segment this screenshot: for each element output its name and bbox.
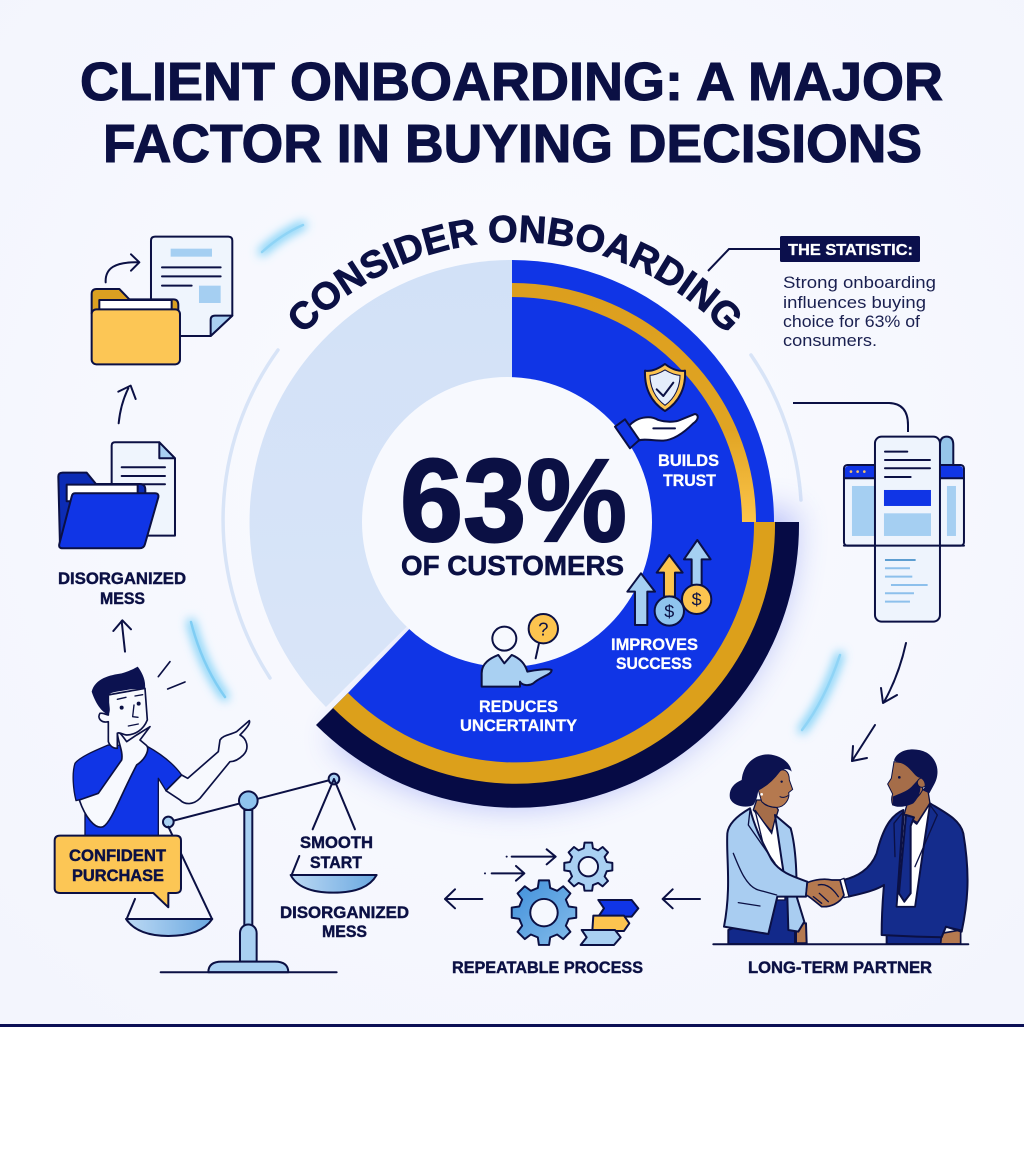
- label: builds trust: BUILDS: [658, 451, 719, 470]
- decorative glow arcs: [191, 225, 840, 730]
- illustration: thinking person: [73, 662, 250, 837]
- label: repeatable process: REPEATABLE PROCESS: [452, 958, 643, 977]
- beam: [163, 774, 339, 827]
- shirt: [73, 745, 182, 837]
- donut glow: [330, 510, 795, 807]
- motion arrows: [484, 849, 556, 881]
- center statistic: OF CUSTOMERS: [401, 550, 624, 581]
- statistic description: consumers.: [783, 332, 877, 350]
- label: long-term partner: LONG-TERM PARTNER: [748, 958, 932, 977]
- label: disorganized mess: MESS: [100, 589, 145, 608]
- icon: person with question: ?: [538, 618, 549, 639]
- label: confident purchase: PURCHASE: [72, 866, 164, 885]
- icon: browser window and document: [844, 437, 964, 622]
- statistic callout: THE STATISTIC:: [788, 242, 913, 259]
- label: confident purchase: [69, 846, 167, 885]
- label: smooth start: [300, 833, 373, 872]
- arrow: blue folder to yellow folder: [118, 386, 136, 423]
- curved heading: CONSIDER ONBOARDING: [290, 215, 740, 330]
- scroll document: [844, 437, 964, 622]
- icon: shield: [645, 364, 685, 411]
- label: improves success: IMPROVES: [611, 635, 698, 654]
- center statistic: 63%: [400, 435, 627, 567]
- statistic description: Strong onboarding: [783, 274, 936, 292]
- right pan: [291, 779, 377, 893]
- label: builds trust: [658, 451, 719, 490]
- label: smooth start: SMOOTH: [300, 833, 373, 852]
- small gear: [564, 843, 612, 891]
- icon: rising arrows and coins: $: [664, 601, 674, 621]
- process chevrons: [581, 900, 638, 945]
- remaining pale segment: [250, 260, 512, 707]
- pointing arm: [166, 721, 250, 804]
- statistic callout: [708, 236, 936, 350]
- icon: yellow folder with document: [92, 237, 232, 364]
- woman: [724, 754, 807, 944]
- title: FACTOR IN BUYING DECISIONS: [103, 114, 922, 174]
- statistic tag: [780, 236, 920, 262]
- label: disorganized mess: DISORGANIZED: [58, 569, 186, 588]
- statistic description: choice for 63% of: [783, 313, 920, 331]
- blue segment upper: [512, 260, 774, 522]
- thinking marks: [158, 662, 185, 689]
- browser window: [844, 465, 964, 546]
- icon: repeatable process gears: [484, 843, 638, 945]
- statistic description: influences buying: [783, 294, 926, 312]
- icon: rising arrows and coins: [627, 540, 711, 626]
- label: disorganized mess under scale: MESS: [322, 922, 367, 941]
- stand: [161, 810, 337, 972]
- navy outer ring: [316, 522, 799, 808]
- label: reduces uncertainty: UNCERTAINTY: [460, 716, 578, 735]
- gold ring lower: [333, 522, 775, 784]
- label: reduces uncertainty: REDUCES: [479, 697, 558, 716]
- label: disorganized mess: [58, 569, 186, 608]
- label: reduces uncertainty: [460, 697, 578, 735]
- blue segment lower: [348, 522, 754, 762]
- illustration: balance scale: [126, 774, 377, 972]
- label: disorganized mess under scale: DISORGANIZED: [280, 903, 409, 922]
- gold ring upper: [512, 290, 749, 522]
- large gear: [512, 880, 576, 945]
- leader line: [708, 249, 780, 271]
- man: [843, 749, 968, 944]
- head: [92, 667, 147, 748]
- left pan: [126, 827, 212, 936]
- arrow: process to scale: [445, 889, 482, 908]
- icon: blue folder with document: [58, 442, 175, 548]
- connector to documents: [793, 403, 908, 432]
- label: smooth start: START: [310, 853, 363, 872]
- label: builds trust: TRUST: [663, 471, 717, 490]
- title: [80, 52, 943, 174]
- label: improves success: [611, 635, 698, 673]
- title: CLIENT ONBOARDING: A MAJOR: [80, 52, 943, 112]
- label: disorganized mess under scale: [280, 903, 409, 941]
- arrow: partner to process: [663, 889, 700, 908]
- arrow: documents to partners: [881, 643, 906, 703]
- clasped hands: [806, 878, 849, 907]
- arrow: to handshake: [852, 725, 875, 761]
- donut chart 63 percent: [250, 260, 799, 808]
- statistic description: [783, 274, 936, 350]
- arrow: person up to mess: [113, 620, 131, 652]
- icon group: builds trust: [615, 364, 698, 448]
- ground line: [713, 941, 968, 947]
- callout: confident purchase: [55, 836, 181, 907]
- illustration: handshake: [713, 749, 968, 944]
- icon: rising arrows and coins: $: [692, 590, 702, 610]
- arm on chin: [79, 727, 150, 827]
- icon: person with question: [482, 614, 558, 687]
- icon: open hand: [615, 414, 698, 448]
- label: confident purchase: CONFIDENT: [69, 846, 167, 865]
- center circle: [362, 377, 652, 667]
- label: improves success: SUCCESS: [616, 654, 692, 673]
